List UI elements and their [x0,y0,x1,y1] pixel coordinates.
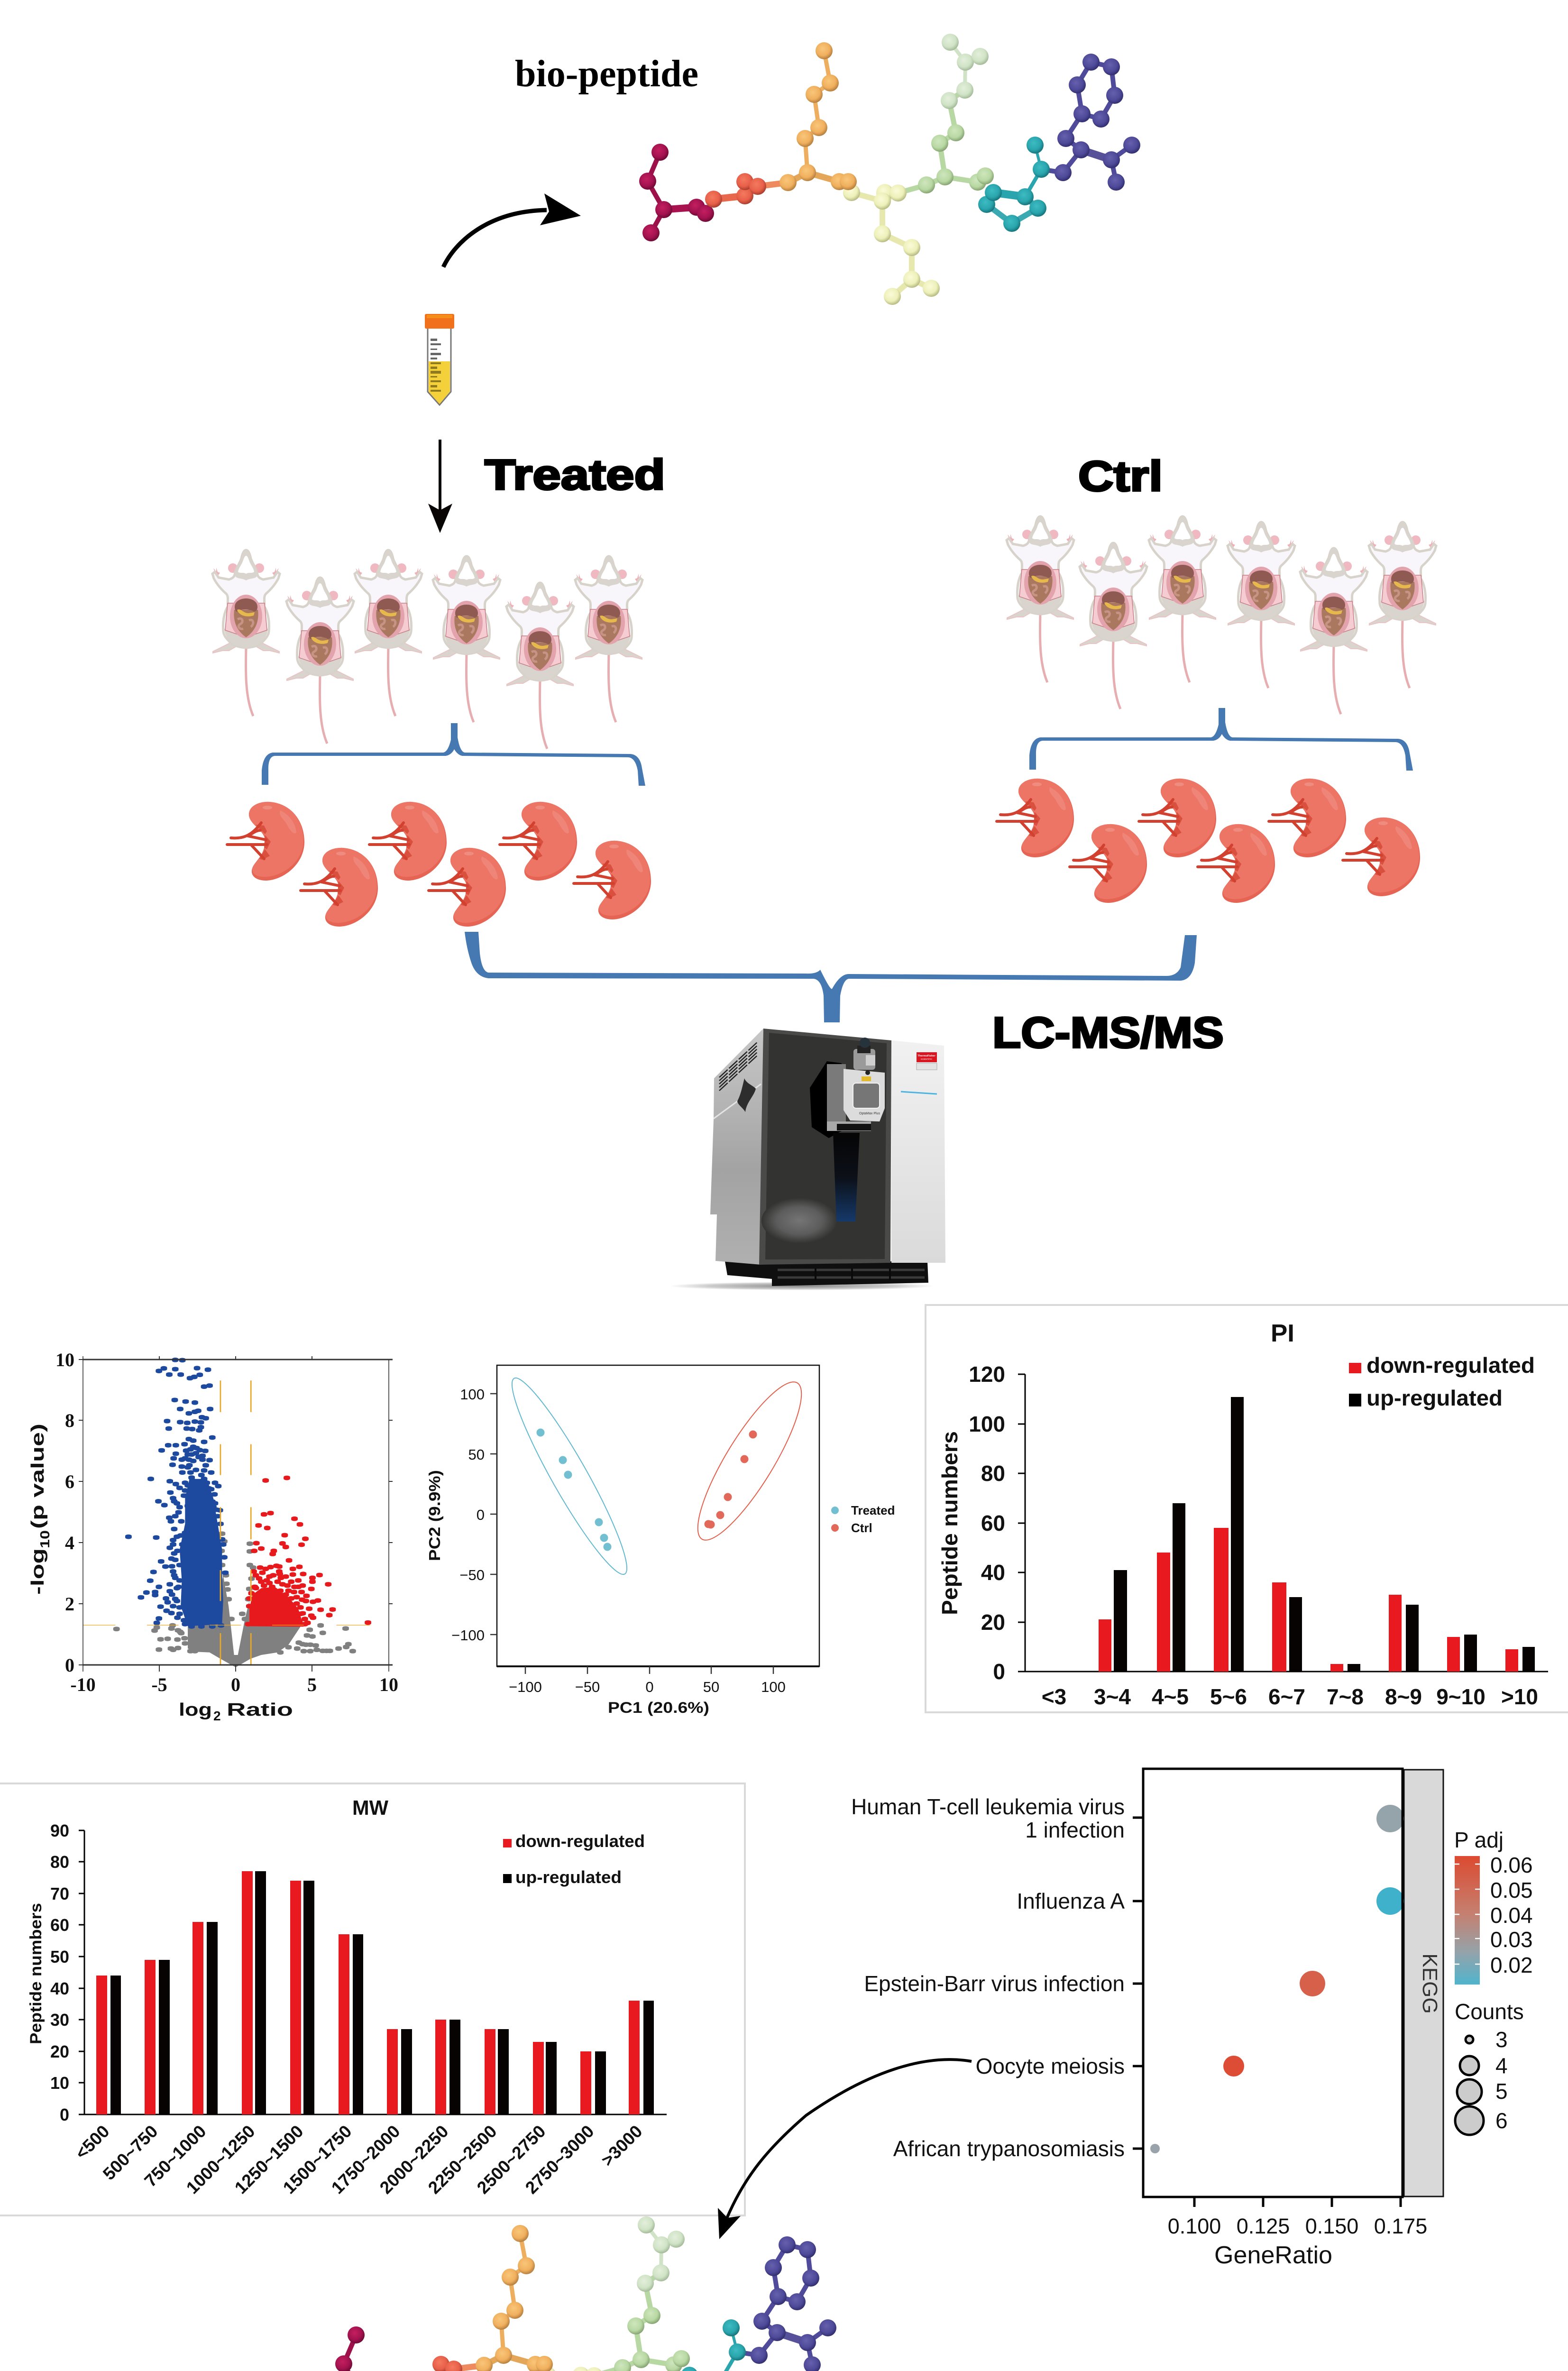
x tick labels: 0.125 [1237,2214,1290,2238]
bracket: both kidney groups to LC-MS/MS [465,932,1197,1022]
y tick labels: 80 [50,1852,69,1872]
heading: Treated: Treated [485,451,665,499]
chart: volcano plot [28,1349,398,1723]
x tick labels: >10 [1501,1684,1538,1709]
legend: P adj: 0.04 [1490,1903,1533,1928]
x tick labels: 1250~1500 [231,2122,307,2197]
y tick labels: 50 [468,1446,485,1463]
icons: control kidneys [997,779,1420,903]
x tick labels: 1000~1250 [183,2122,259,2197]
x tick labels: 3~4 [1094,1684,1131,1709]
strip: KEGG [1404,1770,1443,2196]
x tick labels: <500 [72,2122,113,2163]
x tick labels: 2750~3000 [522,2122,598,2197]
icons: control mice group [1007,516,1436,714]
up-regulated points [248,1477,368,1627]
x tick labels: 0.175 [1374,2214,1427,2238]
pathway labels: 1 infection [1025,1818,1125,1842]
x tick labels [509,1679,786,1695]
axes [79,1830,667,2114]
plot frame [1143,1769,1403,2197]
axis ticks [1133,1818,1401,2207]
down-regulated bars [96,1871,640,2114]
x tick labels: 5 [307,1674,317,1695]
non-significant points [117,1533,353,1667]
pathway labels: Oocyte meiosis [976,2054,1125,2078]
x tick labels: 0.150 [1305,2214,1358,2238]
pathway labels: Influenza A [1017,1889,1125,1913]
pathway labels [851,1794,1125,2161]
chart: PI bar chart [926,1305,1568,1712]
y tick labels: 0 [65,1654,74,1676]
y tick labels: 100 [969,1412,1005,1436]
pathway labels: African trypanosomiasis [893,2136,1125,2161]
x tick labels: 6~7 [1268,1684,1305,1709]
x tick labels: 1750~2000 [328,2122,404,2197]
y axis title: Peptide numbers [937,1431,962,1615]
y tick labels: 40 [50,1979,69,1998]
legend: Counts [1455,1999,1524,2135]
y tick labels [50,1821,69,2124]
pathway labels: Epstein-Barr virus infection [864,1971,1125,1996]
x tick labels: 8~9 [1385,1684,1422,1709]
legend: P adj: P adj [1454,1828,1504,1852]
y tick labels: 4 [65,1532,74,1553]
y tick labels: 100 [460,1386,485,1403]
arrow: Oocyte meiosis to bio-peptide [718,2059,972,2239]
molecule: bio-peptide (bottom) [335,2216,836,2371]
y tick labels: 2 [65,1593,74,1615]
y tick labels: 20 [981,1610,1005,1635]
down-regulated bars [1099,1528,1518,1672]
x tick labels: 10 [379,1674,398,1695]
y tick labels: 60 [50,1915,69,1935]
x tick labels: <3 [1042,1684,1066,1709]
control samples [705,1430,757,1529]
confidence ellipses [499,1370,817,1582]
legend: P adj [1454,1828,1533,1985]
y axis title: (p value) [28,1424,48,1529]
ThermoFisher logo [917,1052,937,1062]
heading: Ctrl: Ctrl [1078,453,1163,500]
ThermoFisher logo: ThermoFisher [917,1055,935,1057]
y tick labels: 60 [981,1511,1005,1535]
legend: up-regulated [515,1867,622,1887]
x tick labels: 5~6 [1210,1684,1247,1709]
x tick labels: 0 [231,1674,240,1695]
dots [1150,1805,1404,2153]
x tick labels [70,1674,398,1695]
x tick labels: 100 [761,1679,786,1695]
legend: Counts: 3 [1495,2027,1508,2052]
legend [1349,1353,1535,1410]
axes [1018,1374,1548,1672]
x tick labels: 1500~1750 [279,2122,356,2197]
pathway labels: Human T-cell leukemia virus [851,1794,1125,1819]
y tick labels: 80 [981,1461,1005,1486]
y tick labels: −100 [451,1627,485,1644]
title: PI [1271,1320,1294,1347]
axis titles: PC1 (20.6%) [608,1699,709,1716]
x tick labels: 2250~2500 [424,2122,501,2197]
x axis title: GeneRatio [1214,2242,1332,2269]
chart: PCA scatter [426,1365,895,1716]
axes [79,1356,393,1672]
y tick labels: 8 [65,1410,74,1431]
y tick labels: 0 [477,1507,485,1523]
heading: bio-peptide: bio-peptide [515,53,698,95]
legend: up-regulated [1366,1386,1503,1410]
OptaMax label: OptaMax Plus [859,1112,880,1115]
volcano points [83,1359,370,1667]
legend: Counts: 5 [1495,2079,1508,2104]
strip: KEGG: KEGG [1418,1953,1441,2014]
y axis title: 10 [37,1530,52,1548]
molecule: bio-peptide (top) [639,34,1140,305]
x tick labels: 4~5 [1152,1684,1189,1709]
y tick labels [55,1349,74,1676]
legend: down-regulated [515,1831,645,1851]
x tick labels: −50 [575,1679,600,1695]
x tick labels [1168,2214,1427,2238]
legend: P adj: 0.03 [1490,1927,1533,1952]
ThermoFisher logo: SCIENTIFIC [921,1058,932,1060]
x tick labels [1042,1684,1538,1709]
x tick labels: >3000 [597,2122,646,2170]
chart: MW bar chart [0,1783,745,2215]
x tick labels: 2500~2750 [473,2122,550,2197]
arrow: curved, tube to bio-peptide [443,193,581,267]
icon: sample tube [425,314,454,405]
x tick labels: 7~8 [1327,1684,1364,1709]
arrow: tube down to treated mice [428,440,452,533]
title: MW [352,1796,388,1820]
axis ticks [490,1394,773,1674]
legend: down-regulated [1366,1353,1535,1378]
up-regulated bars [110,1871,654,2114]
y tick labels: 40 [981,1560,1005,1585]
y tick labels: 0 [60,2105,69,2124]
x tick labels: 50 [703,1679,719,1695]
y tick labels [969,1362,1005,1684]
x axis title: log [179,1700,212,1720]
x axis title: Ratio [227,1700,293,1720]
legend: P adj: 0.06 [1490,1853,1533,1877]
legend: P adj: 0.05 [1490,1878,1533,1902]
legend [831,1503,895,1535]
y tick labels: 10 [50,2073,69,2093]
legend: P adj: 0.02 [1490,1953,1533,1977]
y tick labels: 120 [969,1362,1005,1387]
x axis title: 2 [213,1709,221,1723]
y tick labels: 30 [50,2010,69,2030]
x tick labels: 750~1000 [141,2122,210,2191]
y axis title: Peptide numbers [27,1903,45,2044]
bracket: control mice [1029,708,1413,771]
y tick labels: 90 [50,1821,69,1840]
y tick labels [451,1386,485,1644]
y tick labels: 6 [65,1471,74,1492]
chart: PCA scatter: PC2 (9.9%) [426,1470,443,1561]
x tick labels: −100 [509,1679,542,1695]
y tick labels: 70 [50,1884,69,1903]
bracket: treated mice [262,723,645,786]
y tick labels: 10 [55,1349,74,1370]
down-regulated points [128,1359,225,1627]
x tick labels: 2000~2250 [376,2122,452,2197]
x tick labels: 500~750 [99,2122,162,2184]
x tick labels [72,2122,646,2197]
legend: Ctrl [851,1521,872,1535]
x axis title [179,1700,293,1723]
legend: Treated [851,1503,895,1517]
legend: Counts: Counts [1455,1999,1524,2024]
icon: mass spectrometer [669,1029,945,1290]
heading: LC-MS/MS: LC-MS/MS [992,1009,1224,1057]
x tick labels: 0.100 [1168,2214,1221,2238]
y tick labels: 20 [50,2042,69,2061]
threshold lines [83,1380,370,1665]
y axis title [28,1424,52,1595]
y tick labels: 50 [50,1947,69,1967]
y tick labels: −50 [459,1567,485,1583]
x tick labels: 9~10 [1436,1684,1485,1709]
legend [503,1831,645,1887]
icons: treated kidneys [227,802,651,927]
y tick labels: 0 [993,1659,1005,1684]
x tick labels: 0 [645,1679,654,1695]
up-regulated bars [1114,1397,1535,1672]
legend: Counts: 6 [1495,2108,1508,2133]
chart: KEGG dot plot [851,1769,1533,2269]
x tick labels: -5 [151,1674,167,1695]
x tick labels: -10 [70,1674,96,1695]
treated samples [537,1428,612,1551]
legend: Counts: 4 [1495,2053,1508,2078]
y axis title: -log [28,1548,48,1595]
icons: treated mice group [212,550,642,749]
